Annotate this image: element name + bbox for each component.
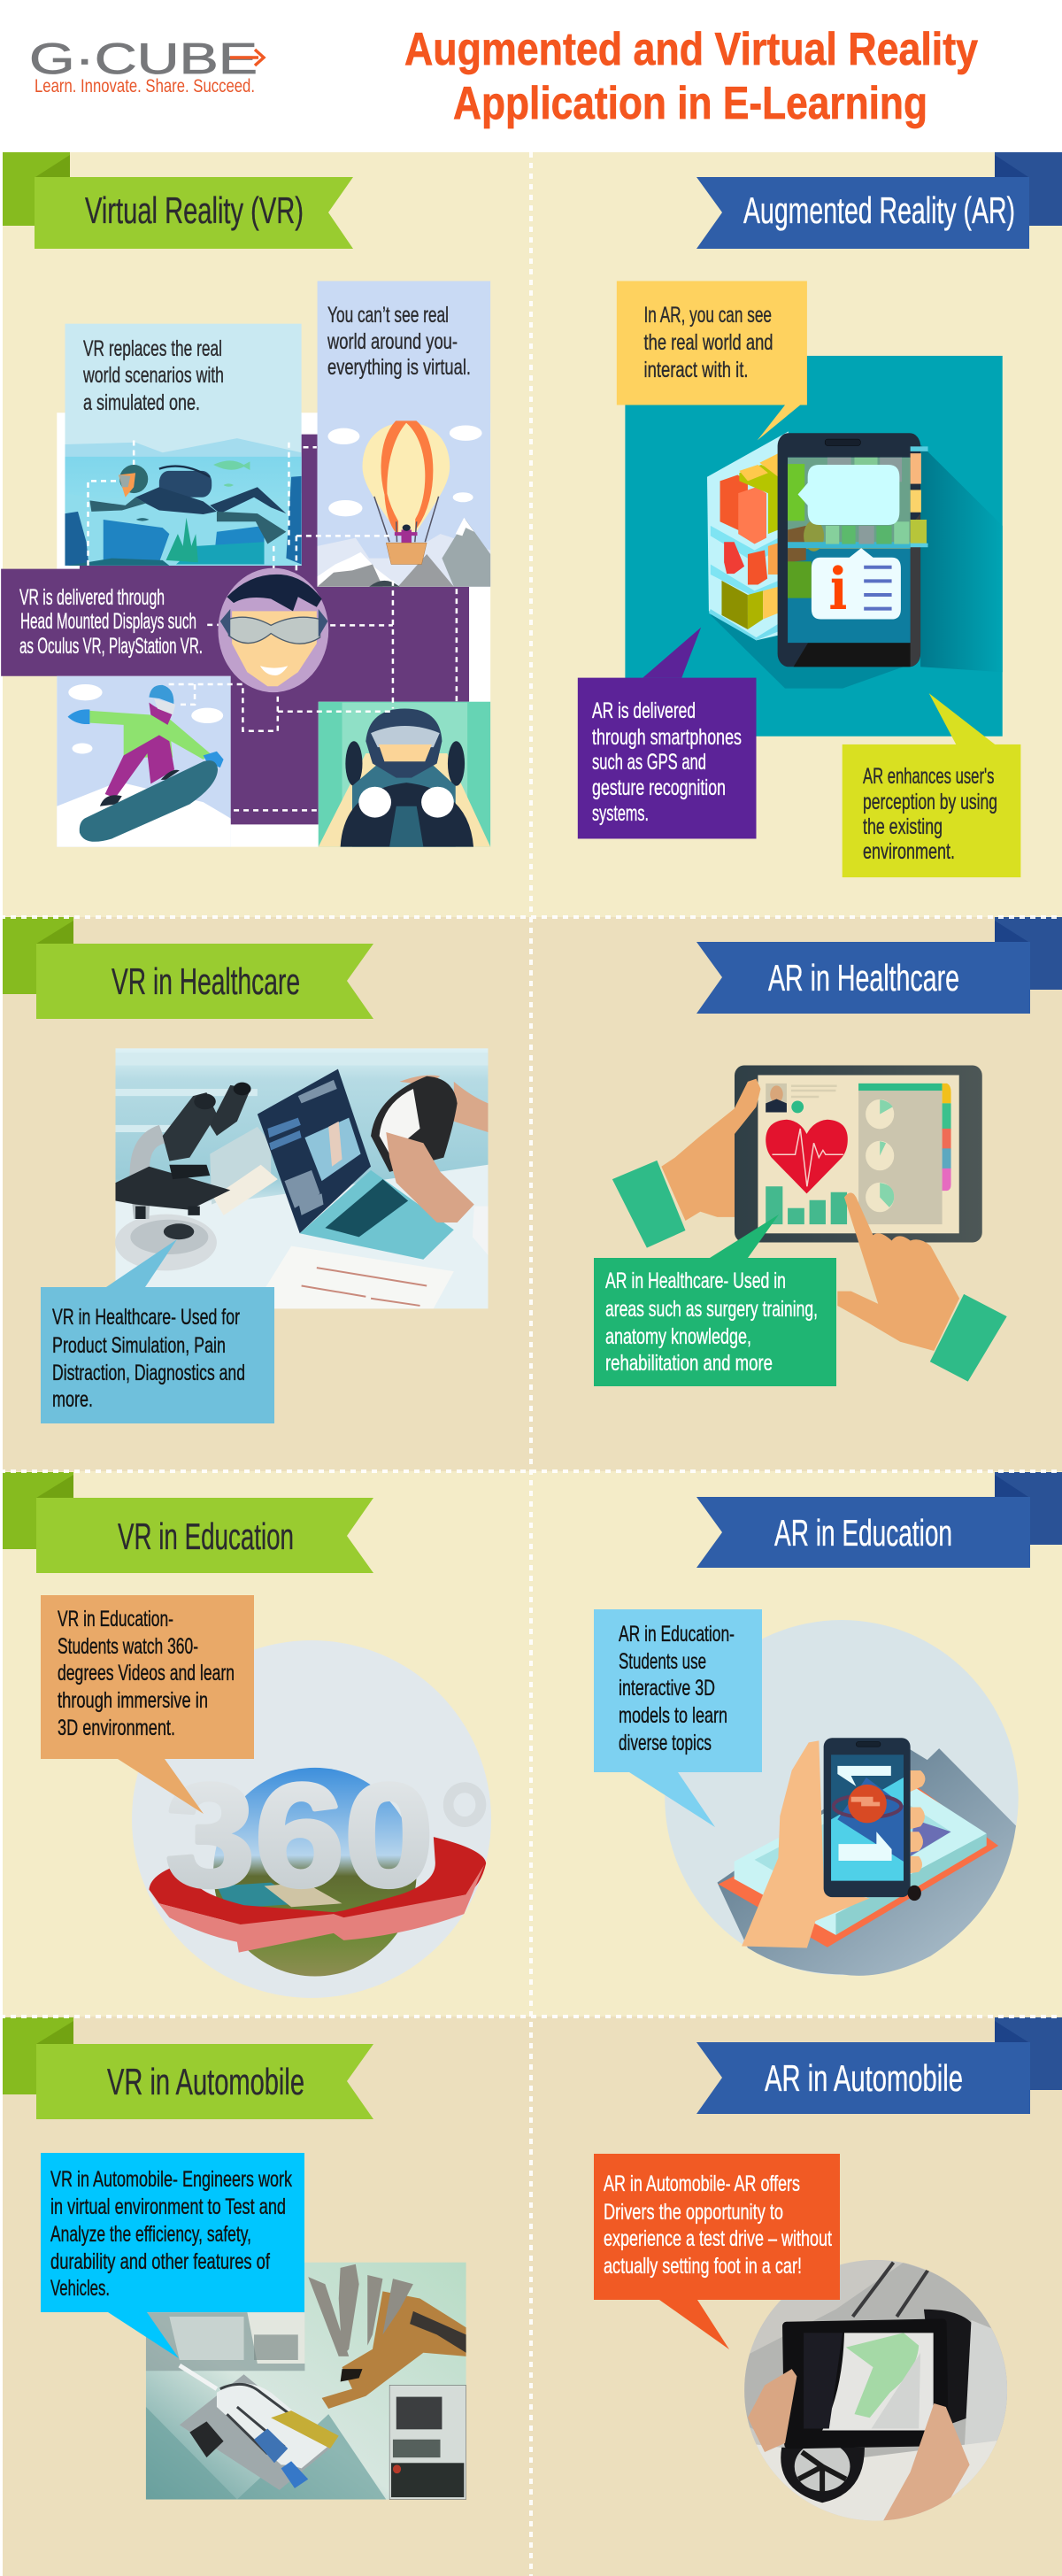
callout: VR in Education: 3D environment. (58, 1716, 175, 1740)
text: AR delivered through smartphones: systems. (592, 801, 649, 826)
control panel (389, 2386, 466, 2500)
callout: delivered through smartphones (578, 628, 756, 838)
callout: AR in Automobile: AR in Automobile- AR offers (604, 2171, 800, 2196)
illustration: tablet with heart monitor and hands (612, 1065, 1007, 1382)
panel: VR in Automobile (3, 2017, 531, 2576)
callout: everything is virtual (327, 303, 471, 380)
panel: VR in Healthcare (3, 917, 531, 1471)
callout: VR in Automobile: in virtual environment to Test and (50, 2194, 286, 2219)
panel: AR in Education (531, 1471, 1062, 2017)
text: AR delivered through smartphones (592, 698, 742, 826)
callout: VR in Automobile (41, 2153, 304, 2358)
ribbon heading: AR in Automobile (696, 2017, 1062, 2114)
360 degrees label: 360 (165, 1754, 434, 1917)
callout: AR in Education: diverse topics (619, 1731, 712, 1755)
text: AR delivered through smartphones: AR is delivered (592, 698, 696, 723)
ribbon heading: AR in Education (696, 1472, 1062, 1568)
logo: G-Cube: G·CUBE (29, 35, 258, 83)
callout: AR in Healthcare (594, 1215, 836, 1386)
callout: everything is virtual: world around you- (327, 329, 458, 354)
callout: head mounted displays (19, 585, 203, 659)
callout: head mounted displays: VR is delivered through (19, 585, 165, 610)
callout: everything is virtual: everything is virtual. (327, 355, 471, 380)
dashed connector lines (88, 440, 457, 810)
callout: AR in Education: Students use (619, 1649, 706, 1674)
text: AR delivered through smartphones: through smartphones (592, 725, 742, 750)
title (404, 24, 978, 129)
logo: G-Cube (29, 35, 264, 96)
bars (766, 1186, 847, 1224)
page header (0, 0, 1062, 152)
title: Augmented and Virtual Reality (404, 24, 978, 75)
panel: AR in Healthcare (531, 917, 1062, 1471)
text: In AR you can see (644, 303, 773, 382)
ribbon heading: VR in Education: VR in Education (118, 1516, 294, 1557)
red arrow ring (149, 1837, 486, 1953)
photo: microscope, laptop and VR headset (115, 1048, 488, 1308)
illustration: phone showing planet over a book (665, 1620, 1019, 1976)
ribbon heading: Virtual Reality (VR) (3, 152, 353, 249)
text: In AR you can see: In AR, you can see (644, 303, 772, 328)
scene: snowboarder (57, 676, 231, 847)
scene: hot-air balloon (318, 281, 490, 587)
text: AR enhances perception (863, 764, 997, 864)
callout: VR in Education: degrees Videos and learn (58, 1661, 235, 1685)
callout: see real world (617, 281, 807, 440)
ribbon heading: AR in Healthcare (696, 917, 1062, 1014)
text: In AR you can see: interact with it. (644, 358, 749, 382)
callout: AR in Automobile: Drivers the opportunity to (604, 2200, 783, 2225)
illustration: 360 degree globe (132, 1640, 492, 1998)
ribbon heading: VR in Education (3, 1472, 373, 1573)
callout: VR in Healthcare: Product Simulation, Pain (52, 1333, 226, 1358)
callout: head mounted displays: Head Mounted Displays such (20, 609, 196, 634)
callout: everything is virtual: You can’t see real (327, 303, 449, 328)
callout: VR in Healthcare: Distraction, Diagnostics and (52, 1361, 245, 1385)
panel: AR in Automobile (531, 2017, 1062, 2576)
callout: AR in Education: interactive 3D (619, 1676, 715, 1701)
heart (766, 1120, 848, 1193)
logo: G-Cube: Learn. Innovate. Share. Succeed. (35, 76, 255, 96)
callout: VR replaces the real world (82, 336, 224, 415)
text: AR enhances perception: the existing (863, 814, 943, 839)
callout: VR in Healthcare: VR in Healthcare- Used for (52, 1305, 240, 1330)
callout: VR in Automobile: Vehicles. (50, 2276, 110, 2301)
callout: VR in Education: VR in Education- (58, 1607, 173, 1631)
callout: head mounted displays: as Oculus VR, PlayStation VR. (19, 634, 203, 659)
tablet (735, 1065, 982, 1243)
callout: AR in Automobile (594, 2154, 840, 2349)
panel: VR in Education (3, 1471, 531, 2017)
AR illustration: smartphone and shelf (578, 281, 1020, 877)
ribbon heading: AR in Education: AR in Education (774, 1512, 952, 1554)
callout: AR in Automobile: experience a test drive – without (604, 2226, 832, 2251)
scene: driver (319, 702, 490, 847)
callout: AR in Education: models to learn (619, 1703, 727, 1728)
360 degrees label: ° (437, 1752, 492, 1915)
callout: VR in Automobile: Analyze the efficiency, safety, (50, 2222, 251, 2247)
hand (742, 1740, 925, 1948)
icon: VR user face (218, 568, 328, 692)
phone (778, 433, 928, 667)
photo: virtual engineering of robot arm and engine (146, 2263, 466, 2500)
ribbon heading: Augmented Reality (AR) (696, 152, 1062, 249)
engine cutaway (180, 2365, 339, 2490)
ribbon heading: AR in Healthcare: AR in Healthcare (768, 957, 959, 999)
callout: VR in Education: Students watch 360- (58, 1634, 198, 1659)
callout: VR replaces the real world: world scenarios with (82, 363, 224, 388)
callout: VR in Education (41, 1595, 254, 1814)
callout: VR in Healthcare (41, 1239, 274, 1423)
text: AR enhances perception: AR enhances user's (863, 764, 995, 789)
callout: AR in Healthcare: rehabilitation and more (605, 1351, 773, 1376)
ribbon heading: VR in Automobile (3, 2017, 373, 2119)
book (719, 1785, 998, 1947)
callout: AR in Healthcare: AR in Healthcare- Used in (605, 1269, 786, 1293)
callout: AR in Education (594, 1609, 762, 1827)
callout: VR in Healthcare: more. (52, 1387, 93, 1412)
text: AR delivered through smartphones: gesture recognition (592, 775, 726, 800)
callout: VR in Education: through immersive in (58, 1688, 208, 1713)
phone (824, 1738, 911, 1897)
ribbon heading: VR in Automobile: VR in Automobile (107, 2061, 304, 2102)
ribbon heading: VR in Healthcare (3, 917, 373, 1019)
scene: diver (65, 324, 302, 566)
callout: VR in Automobile: durability and other features of (50, 2249, 270, 2274)
globe (213, 1768, 417, 1977)
title: Application in E-Learning (453, 78, 927, 129)
callout: AR in Education: AR in Education- (619, 1622, 735, 1647)
robot arm (308, 2264, 466, 2409)
callout: AR in Healthcare: anatomy knowledge, (605, 1324, 751, 1349)
text: AR enhances perception: environment. (863, 839, 955, 864)
callout: enhances perception (843, 693, 1020, 877)
text: AR enhances perception: perception by using (863, 790, 997, 814)
ribbon heading: VR in Healthcare: VR in Healthcare (112, 960, 300, 1002)
VR illustration (1, 281, 490, 847)
panel: Augmented Reality (531, 152, 1062, 917)
right hand (837, 1192, 1007, 1382)
callout: VR replaces the real world: VR replaces the real (83, 336, 222, 361)
callout: AR in Healthcare: areas such as surgery training, (605, 1297, 818, 1322)
ribbon heading: AR in Automobile: AR in Automobile (765, 2057, 963, 2099)
text: AR delivered through smartphones: such as GPS and (592, 750, 706, 775)
left hand (612, 1079, 760, 1248)
shelf (707, 431, 819, 640)
panel: Virtual Reality (1, 152, 531, 917)
callout: VR in Automobile: VR in Automobile- Engineers work (50, 2167, 292, 2192)
ribbon heading: Virtual Reality (VR): Virtual Reality (VR) (85, 189, 304, 231)
photo: tablet showing car repair overlay (744, 2260, 1007, 2521)
text: In AR you can see: the real world and (644, 330, 773, 355)
callout: VR replaces the real world: a simulated one. (83, 390, 200, 415)
data panel (858, 1084, 943, 1224)
callout: AR in Automobile: actually setting foot in a car! (604, 2254, 802, 2279)
